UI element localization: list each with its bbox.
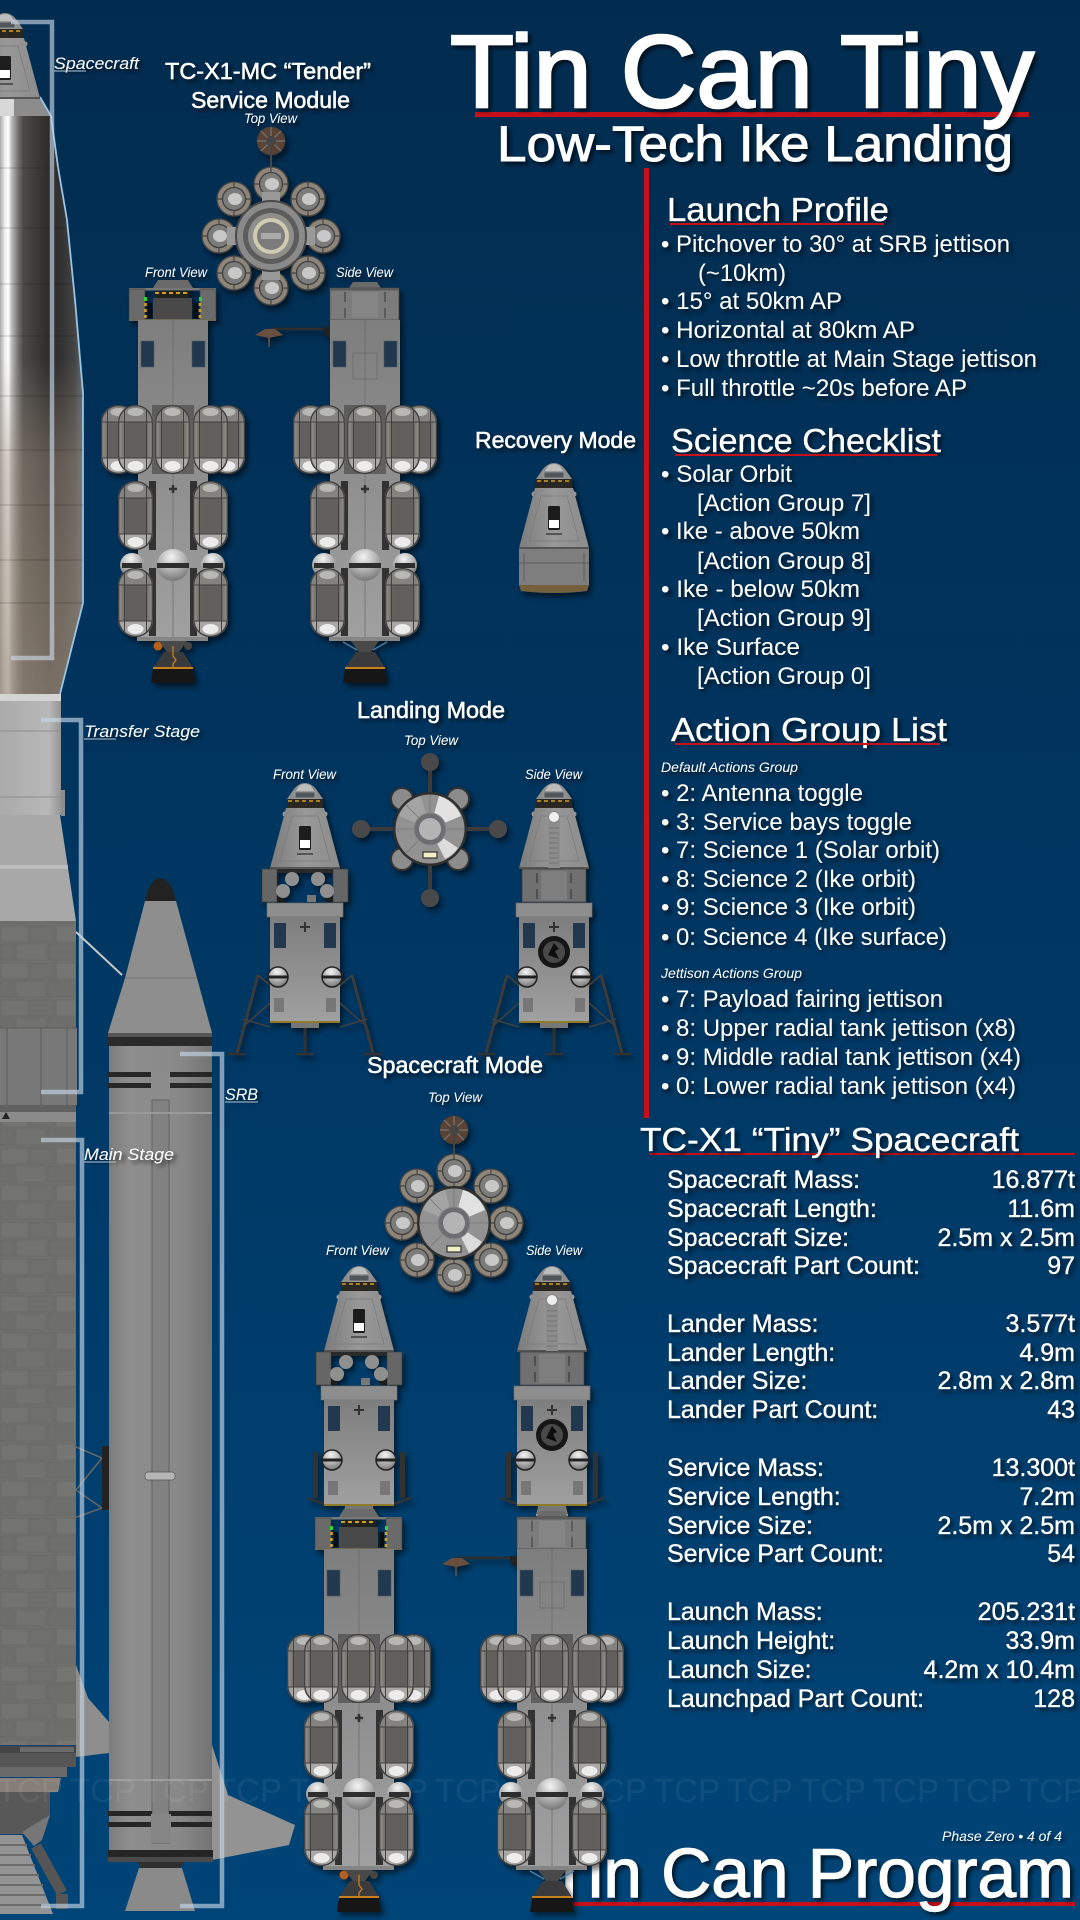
main title	[450, 14, 1034, 172]
launch profile list: (~10km)	[698, 260, 786, 287]
label: Main Stage: Main Stage	[84, 1145, 174, 1164]
TCP watermark: TCP	[581, 1772, 647, 1809]
science checklist items: [Action Group 9]	[697, 605, 871, 632]
heading: TC-X1 Tiny Spacecraft: TC-X1 “Tiny” Spacecraft	[640, 1121, 1019, 1158]
recovery capsule	[519, 463, 589, 593]
launch stats: 4.2m x 10.4m	[924, 1656, 1075, 1684]
service module front view	[101, 280, 245, 683]
left fin	[76, 1665, 109, 1757]
lander stats: 3.577t	[1005, 1310, 1075, 1338]
launch profile list: • Pitchover to 30° at SRB jettison	[661, 231, 1010, 258]
heading: Science Checklist: Science Checklist	[671, 422, 941, 459]
spacecraft stats: 11.6m	[1007, 1195, 1075, 1223]
launch stats: Launch Height:	[667, 1627, 835, 1655]
bracket: SRB	[180, 1054, 222, 1906]
science checklist items: • Ike Surface	[661, 634, 800, 661]
service stats	[667, 1454, 1075, 1568]
TCP watermark: TCP	[654, 1772, 720, 1809]
service stats: Service Length:	[667, 1483, 841, 1511]
panel: spacecraft statistics	[640, 1121, 1075, 1713]
label: Spacecraft: Spacecraft	[54, 54, 140, 73]
lander stats: Lander Part Count:	[667, 1396, 878, 1424]
spacecraft stats: 2.5m x 2.5m	[937, 1224, 1075, 1252]
spacecraft stats: 97	[1047, 1252, 1075, 1280]
spacecraft stats: Spacecraft Size:	[667, 1224, 849, 1252]
right fin	[212, 1745, 295, 1860]
heading: Landing Mode	[273, 697, 583, 782]
TCP watermark: TCP	[727, 1772, 793, 1809]
jettison actions list: Jettison Actions Group	[660, 965, 802, 981]
TCP watermark: TCP	[289, 1772, 355, 1809]
TCP watermark: TCP	[800, 1772, 866, 1809]
default actions list: Default Actions Group	[661, 759, 798, 775]
lower strut bracket	[74, 1446, 110, 1518]
lander side view	[477, 783, 631, 1054]
spacecraft mode section	[287, 1052, 624, 1912]
heading: Spacecraft Mode: Spacecraft Mode	[367, 1052, 543, 1078]
TCP watermark: TCP	[70, 1772, 136, 1809]
heading: Recovery Mode: Recovery Mode	[475, 427, 636, 453]
heading: Action Group List: Action Group List	[671, 711, 947, 748]
science checklist items	[661, 461, 871, 690]
lander stats: 2.8m x 2.8m	[937, 1367, 1075, 1395]
launch profile list: • Low throttle at Main Stage jettison	[661, 346, 1037, 373]
TCP watermark: TCP	[143, 1772, 209, 1809]
heading: Landing Mode: Top View	[404, 732, 459, 748]
science checklist items: [Action Group 8]	[697, 548, 871, 575]
service stats: 2.5m x 2.5m	[937, 1512, 1075, 1540]
service module top view	[202, 127, 340, 305]
lander stats: 43	[1047, 1396, 1075, 1424]
launch vehicle: main rocket stack	[0, 13, 295, 1914]
science checklist items: • Ike - below 50km	[661, 576, 860, 603]
spacecraft front stack	[287, 1266, 431, 1912]
science checklist items: [Action Group 7]	[697, 490, 871, 517]
spacecraft side stack	[442, 1266, 624, 1912]
spacecraft stats: Spacecraft Length:	[667, 1195, 877, 1223]
footer note: Phase Zero • 4 of 4	[942, 1828, 1062, 1844]
lander stats: 4.9m	[1019, 1339, 1075, 1367]
label: Transfer Stage: Transfer Stage	[84, 722, 200, 741]
default actions list: • 7: Science 1 (Solar orbit)	[661, 837, 940, 864]
TCP watermark: TCP	[435, 1772, 501, 1809]
launch profile list: • Horizontal at 80km AP	[661, 317, 915, 344]
bottom title: Tin Can Program: Tin Can Program	[548, 1834, 1074, 1912]
lander top view	[352, 753, 507, 907]
landing mode section	[228, 697, 631, 1054]
solid rocket booster	[108, 878, 213, 1911]
service stats: Service Size:	[667, 1512, 813, 1540]
spacecraft stats: Spacecraft Part Count:	[667, 1252, 920, 1280]
title: Tin Can Tiny: Tin Can Tiny	[450, 14, 1034, 129]
default actions list: • 9: Science 3 (Ike orbit)	[661, 894, 916, 921]
service stats: 13.300t	[992, 1454, 1075, 1482]
default actions list	[661, 759, 947, 951]
transfer stage	[0, 694, 76, 921]
heading: Spacecraft Mode: Front View	[326, 1242, 390, 1258]
heading: Landing Mode: Side View	[525, 766, 583, 782]
heading: Spacecraft Mode: Top View	[428, 1089, 483, 1105]
lander stats: Lander Length:	[667, 1339, 835, 1367]
jettison actions list: • 0: Lower radial tank jettison (x4)	[661, 1073, 1016, 1100]
section title: TC-X1-MC Tender Service Module	[145, 58, 394, 280]
vertical divider	[644, 168, 649, 1118]
spacecraft stats	[667, 1166, 1075, 1280]
jettison actions list: • 7: Payload fairing jettison	[661, 986, 943, 1013]
TCP watermark: TCP	[946, 1772, 1012, 1809]
spacecraft stats: 16.877t	[992, 1166, 1075, 1194]
lander stats: Lander Size:	[667, 1367, 807, 1395]
section title: TC-X1-MC Tender Service Module: Front View	[145, 264, 208, 280]
heading: Spacecraft Mode	[326, 1052, 583, 1258]
launch stats: Launch Size:	[667, 1656, 812, 1684]
section title: TC-X1-MC Tender Service Module: Top View	[244, 110, 298, 126]
TCP watermark: TCP	[362, 1772, 428, 1809]
heading: Landing Mode: Front View	[273, 766, 337, 782]
section title: TC-X1-MC Tender Service Module: Service Module	[191, 87, 350, 113]
TCP watermark: TCP	[873, 1772, 939, 1809]
subtitle: Low-Tech Ike Landing	[497, 116, 1013, 172]
launch stats: 205.231t	[978, 1598, 1075, 1626]
title underline	[475, 112, 1029, 117]
spacecraft stats: Spacecraft Mass:	[667, 1166, 860, 1194]
default actions list: • 2: Antenna toggle	[661, 780, 863, 807]
section title: TC-X1-MC Tender Service Module: Side View	[336, 264, 394, 280]
launch profile list: • 15° at 50km AP	[661, 288, 842, 315]
bracket: main stage	[41, 1140, 82, 1906]
section title: TC-X1-MC Tender Service Module: TC-X1-MC “Tender”	[165, 58, 371, 84]
launch stats: Launch Mass:	[667, 1598, 823, 1626]
default actions list: • 3: Service bays toggle	[661, 809, 912, 836]
fairing	[0, 97, 83, 694]
stage labels	[54, 54, 258, 1164]
science checklist items: [Action Group 0]	[697, 663, 871, 690]
heading: Spacecraft Mode: Side View	[526, 1242, 583, 1258]
panel: launch profile	[661, 191, 1037, 402]
service stats: Service Mass:	[667, 1454, 824, 1482]
default actions list: • 0: Science 4 (Ike surface)	[661, 924, 947, 951]
heading: Landing Mode: Landing Mode	[357, 697, 505, 723]
service stats: 54	[1047, 1540, 1075, 1568]
recovery mode section	[475, 427, 636, 593]
science checklist items: • Ike - above 50km	[661, 518, 860, 545]
TCP watermark	[0, 1772, 1080, 1809]
launch stats	[667, 1598, 1075, 1713]
lander front view	[228, 783, 382, 1054]
lander stats	[667, 1310, 1075, 1424]
panel: action group list	[660, 711, 1021, 1100]
default actions list: • 8: Science 2 (Ike orbit)	[661, 866, 916, 893]
bracket: transfer stage	[41, 720, 81, 1092]
capsule on top	[0, 13, 40, 99]
launch stats: 33.9m	[1006, 1627, 1075, 1655]
heading: Launch Profile: Launch Profile	[667, 191, 889, 228]
SRB attachment strut	[76, 932, 122, 975]
jettison actions list: • 8: Upper radial tank jettison (x8)	[661, 1015, 1016, 1042]
launch profile list: • Full throttle ~20s before AP	[661, 375, 967, 402]
label: SRB: SRB	[225, 1085, 258, 1104]
service stats: 7.2m	[1019, 1483, 1075, 1511]
jettison actions list: • 9: Middle radial tank jettison (x4)	[661, 1044, 1021, 1071]
bracket: spacecraft	[11, 22, 52, 658]
main stage	[0, 921, 77, 1914]
TCP watermark: TCP	[216, 1772, 282, 1809]
service module section	[101, 58, 437, 683]
spacecraft top view	[385, 1116, 523, 1292]
service module side view	[255, 282, 437, 683]
launch profile list	[661, 231, 1037, 402]
launch stats: 128	[1033, 1685, 1075, 1713]
panel: science checklist	[661, 422, 941, 690]
TCP watermark: TCP	[508, 1772, 574, 1809]
science checklist items: • Solar Orbit	[661, 461, 792, 488]
launch stats: Launchpad Part Count:	[667, 1685, 924, 1713]
lander stats: Lander Mass:	[667, 1310, 818, 1338]
jettison actions list	[660, 965, 1021, 1100]
service stats: Service Part Count:	[667, 1540, 884, 1568]
